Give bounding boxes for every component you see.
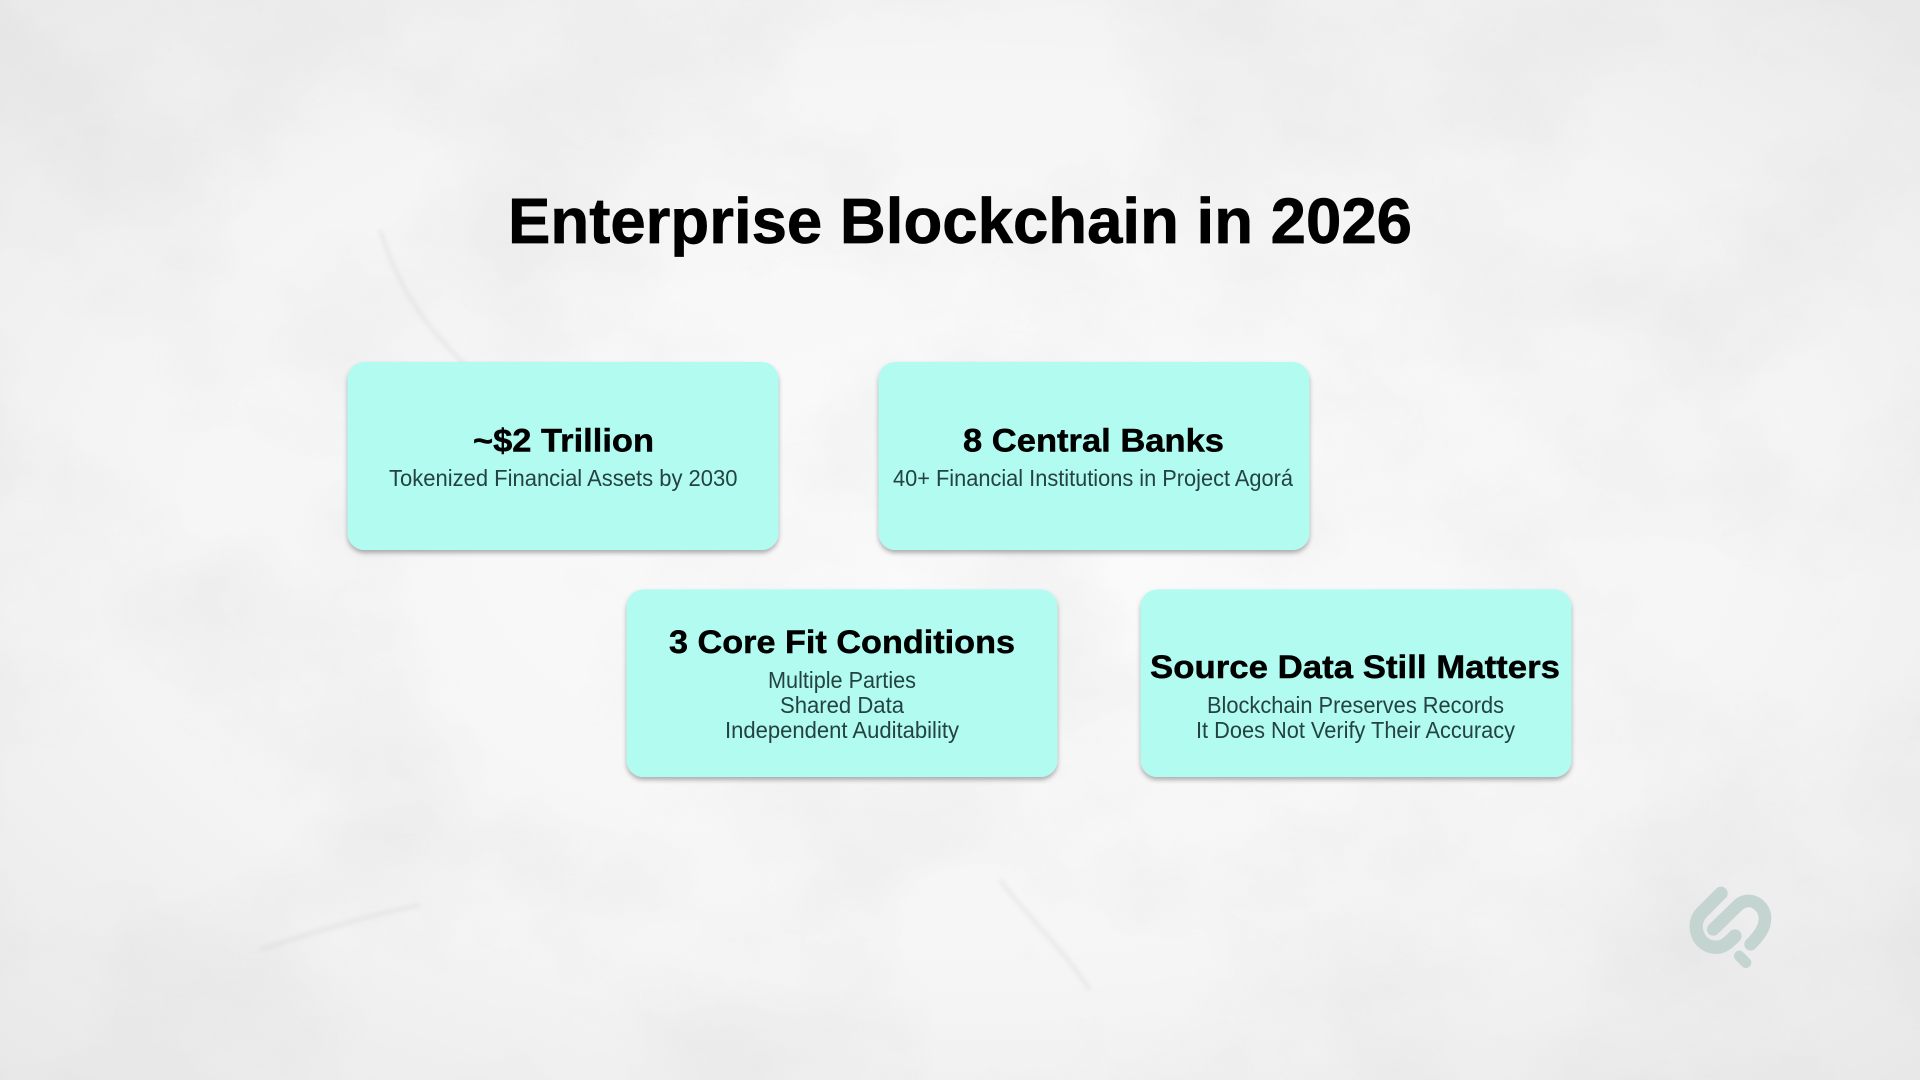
heading: core fit conditions: 3 Core Fit Conditions: [669, 624, 1015, 660]
panel: tokenized assets: [348, 362, 778, 550]
text: conditions list: Independent Auditability: [725, 717, 959, 743]
panel: central banks: [878, 362, 1310, 550]
panel: source data: [1140, 590, 1572, 777]
text: source data notes: It Does Not Verify Their Accuracy: [1196, 717, 1515, 743]
icon: logo: [1696, 893, 1765, 963]
panel: core fit conditions: [626, 590, 1058, 777]
text: institutions: 40+ Financial Institutions in Project Agorá: [893, 465, 1293, 491]
text: conditions list: [725, 667, 959, 743]
title: Enterprise Blockchain in 2026: [508, 185, 1412, 257]
text: conditions list: Shared Data: [780, 692, 904, 718]
text: tokenized assets: Tokenized Financial Assets by 2030: [389, 465, 738, 491]
heading: trillion: ~$2 Trillion: [473, 422, 654, 458]
text: source data notes: [1196, 692, 1515, 743]
text: conditions list: Multiple Parties: [768, 667, 916, 693]
text: source data notes: Blockchain Preserves Records: [1207, 692, 1504, 718]
heading: central banks: 8 Central Banks: [963, 422, 1224, 458]
heading: source data: Source Data Still Matters: [1150, 649, 1560, 685]
